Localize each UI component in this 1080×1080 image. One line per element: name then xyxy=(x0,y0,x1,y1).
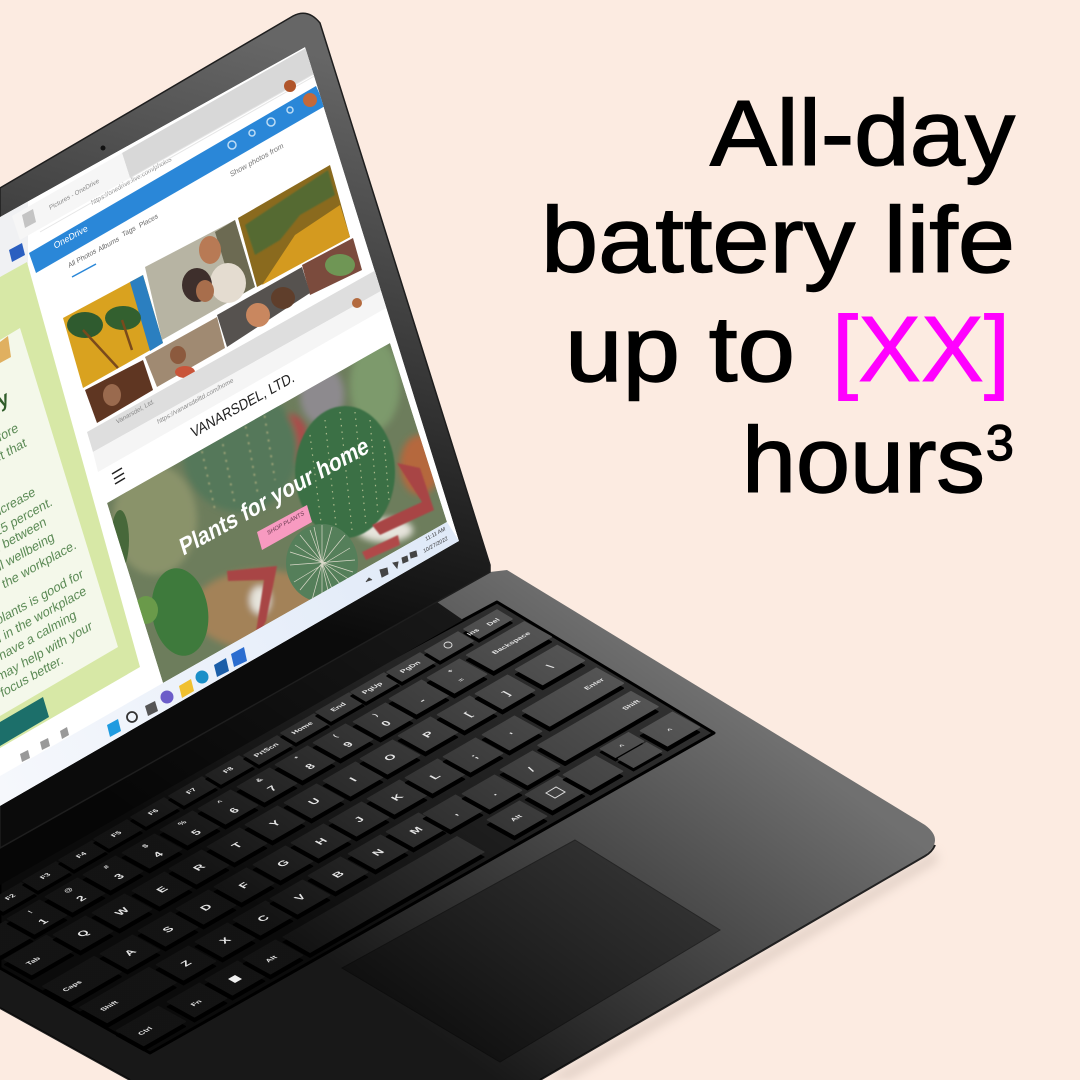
teal leaf image xyxy=(0,697,49,746)
headline text xyxy=(541,81,1016,512)
key labels: 8 xyxy=(303,762,318,771)
key labels: Q xyxy=(75,929,93,939)
deck shading xyxy=(0,578,891,1080)
header icons xyxy=(228,107,293,149)
hamburger menu xyxy=(112,468,125,484)
key labels: PrtScn xyxy=(251,742,281,758)
key labels: Alt xyxy=(508,813,525,823)
prickly pear cactus xyxy=(146,565,214,659)
key labels: Shift xyxy=(620,698,643,711)
photo: man with plant xyxy=(145,317,225,387)
key labels: . xyxy=(488,790,500,797)
key labels: 4 xyxy=(151,850,167,859)
key labels: 3 xyxy=(112,872,127,881)
clock: 11:11 AM xyxy=(425,526,447,543)
key labels: 0 xyxy=(379,719,394,728)
key labels: R xyxy=(191,863,208,873)
key labels: Shift xyxy=(98,999,121,1012)
key labels: I xyxy=(348,776,360,783)
OneDrive window xyxy=(22,48,362,423)
key labels: ^ xyxy=(665,726,676,733)
footnote superscript: 3 xyxy=(986,415,1014,471)
key labels: X xyxy=(217,936,234,945)
key labels: 1 xyxy=(36,917,51,926)
key labels: 5 xyxy=(189,828,204,837)
blurred cactus ribs xyxy=(195,395,275,510)
blue app icon xyxy=(9,243,25,262)
function row keys xyxy=(0,610,512,915)
key labels: Alt xyxy=(263,954,280,964)
bottom row keys xyxy=(117,712,699,1050)
taskbar xyxy=(0,522,459,806)
key labels: ( xyxy=(330,733,340,739)
url: https://vanarsdelltd.com/home xyxy=(157,377,235,426)
key labels: F4 xyxy=(74,851,89,859)
key labels: Tab xyxy=(24,955,43,966)
website window xyxy=(87,270,459,683)
cream article panel xyxy=(0,328,118,716)
photo: palm painting xyxy=(63,275,163,388)
key labels: 2 xyxy=(74,894,89,903)
key labels: U xyxy=(306,797,323,807)
key labels: + xyxy=(445,668,456,674)
key labels: # xyxy=(101,864,111,870)
laptop soft shadow xyxy=(545,850,938,1080)
laptop base deck xyxy=(0,570,935,1080)
photo: succulent plant xyxy=(302,238,362,295)
key labels: = xyxy=(456,677,467,683)
hero headline: Plants for your home xyxy=(177,432,372,562)
key labels xyxy=(3,617,676,1036)
address bar xyxy=(93,291,386,472)
key labels: ' xyxy=(508,731,520,738)
shop plants button: SHOP PLANTS xyxy=(267,511,305,537)
key labels: A xyxy=(122,948,139,958)
key labels: , xyxy=(449,810,461,817)
key labels: E xyxy=(154,885,171,894)
key labels: Enter xyxy=(582,677,607,691)
headline line 3: up to xyxy=(565,297,795,401)
screen base xyxy=(0,47,459,806)
orange image block xyxy=(0,336,11,363)
large cactus xyxy=(295,406,395,538)
key labels: Home xyxy=(289,721,315,735)
deck front rim xyxy=(0,845,935,1080)
headline line 1: All-day xyxy=(710,81,1016,185)
nav tabs: Albums xyxy=(98,236,120,254)
window body xyxy=(28,48,330,264)
key labels: L xyxy=(428,772,444,781)
keyboard well xyxy=(0,602,714,1053)
tab title: Pictures - OneDrive xyxy=(49,177,100,212)
key labels: H xyxy=(313,837,330,847)
key labels: B xyxy=(330,870,347,880)
key labels: S xyxy=(160,925,177,934)
key labels: 9 xyxy=(341,740,356,749)
headline line 4: hours xyxy=(742,408,985,512)
key labels: Z xyxy=(179,959,195,968)
key labels: \ xyxy=(545,663,558,670)
key labels: K xyxy=(389,793,407,803)
photo: selfie xyxy=(217,267,310,347)
photo: tree on orange wall xyxy=(238,165,350,287)
address row divider xyxy=(40,74,318,232)
key labels: End xyxy=(328,701,348,713)
key labels: ^ xyxy=(215,798,226,805)
shop plants button xyxy=(257,505,312,550)
key labels: ] xyxy=(500,690,513,697)
nav tabs: Places xyxy=(139,213,159,230)
key labels: F7 xyxy=(184,787,199,795)
user avatars xyxy=(284,80,317,107)
key labels: F5 xyxy=(109,830,124,838)
power key glyph xyxy=(444,642,452,648)
hinge strip xyxy=(0,602,463,885)
red pots xyxy=(372,463,434,535)
tab strip xyxy=(122,48,314,178)
green page background xyxy=(0,262,140,748)
key labels: F3 xyxy=(38,872,53,880)
menu key glyph xyxy=(546,787,565,798)
shift row keys xyxy=(80,692,658,1027)
magenta placeholder: [XX] xyxy=(832,297,1010,401)
number row keys xyxy=(0,622,551,960)
bottom toolbar icons xyxy=(20,727,69,762)
key labels: J xyxy=(352,815,367,824)
qwerty row keys xyxy=(5,646,584,980)
key labels: PgDn xyxy=(398,660,423,674)
app name: OneDrive xyxy=(53,223,89,251)
address url: https://onedrive.live.com/photos xyxy=(91,155,173,207)
nav tabs: Tags xyxy=(122,225,137,239)
photo: man on wood background xyxy=(85,360,153,423)
left tab strip xyxy=(28,154,130,235)
clock: 10/27/2022 xyxy=(423,536,449,555)
article text xyxy=(0,386,94,707)
key labels: ^ xyxy=(617,742,628,749)
home row keys xyxy=(43,668,623,1006)
key labels: V xyxy=(292,893,309,902)
window title bar xyxy=(87,270,381,452)
laptop screen xyxy=(0,47,459,806)
key labels: N xyxy=(370,848,387,858)
key labels: T xyxy=(230,841,246,850)
key labels: 6 xyxy=(227,806,242,815)
key labels: PgUp xyxy=(360,681,385,695)
key labels: G xyxy=(275,859,293,869)
small spiky cactus xyxy=(286,524,358,602)
windows key glyph xyxy=(228,975,242,983)
nav tabs: All Photos xyxy=(68,248,98,270)
headline line 2: battery life xyxy=(541,188,1015,292)
key labels: P xyxy=(420,730,437,739)
key labels: [ xyxy=(462,711,475,718)
avatar xyxy=(352,298,362,308)
key labels: / xyxy=(526,766,539,773)
key labels: F xyxy=(237,881,253,890)
document toolbar xyxy=(0,201,30,277)
key labels: F8 xyxy=(221,766,236,774)
left green cactus xyxy=(111,510,129,570)
clock xyxy=(423,526,449,555)
brand name: VANARSDEL, LTD. xyxy=(189,369,296,442)
left document window xyxy=(0,201,140,762)
taskbar icons xyxy=(107,647,247,737)
photo: couple at home xyxy=(145,220,255,340)
key labels: - xyxy=(416,697,429,704)
key labels: F2 xyxy=(3,893,18,901)
key labels: 7 xyxy=(265,784,280,793)
webcam xyxy=(100,146,106,150)
trackpad xyxy=(342,840,720,1062)
show photos control: Show photos from xyxy=(229,141,284,179)
laptop lid with bezel xyxy=(0,13,490,848)
key labels: ; xyxy=(468,753,481,760)
window body xyxy=(184,272,459,542)
tab title: Vanarsdel, Ltd. xyxy=(116,398,156,426)
key labels: Ctrl xyxy=(136,1026,155,1036)
key labels: Del xyxy=(484,617,502,627)
system tray xyxy=(366,551,417,582)
key labels: Ins xyxy=(465,627,482,637)
nav tabs xyxy=(68,213,159,277)
keyboard keys xyxy=(0,610,700,1050)
key labels: W xyxy=(113,906,133,917)
key labels: ! xyxy=(25,909,35,915)
key labels: Caps xyxy=(60,979,84,993)
key labels: @ xyxy=(61,886,75,894)
blue header band xyxy=(29,86,325,273)
key labels: O xyxy=(382,753,400,763)
key labels: D xyxy=(198,903,215,913)
key labels: ) xyxy=(370,712,380,718)
key labels: Fn xyxy=(188,999,204,1007)
hero image of cacti xyxy=(107,340,447,683)
key labels: $ xyxy=(140,843,150,849)
key labels: Y xyxy=(267,819,284,828)
key labels: M xyxy=(408,826,426,836)
key labels: C xyxy=(255,914,272,924)
key labels: F6 xyxy=(146,808,161,816)
grey tab icon xyxy=(22,209,36,228)
key labels: * xyxy=(292,755,302,761)
key labels: & xyxy=(253,777,265,783)
key labels: % xyxy=(175,819,189,827)
key labels: Backspace xyxy=(489,631,533,655)
